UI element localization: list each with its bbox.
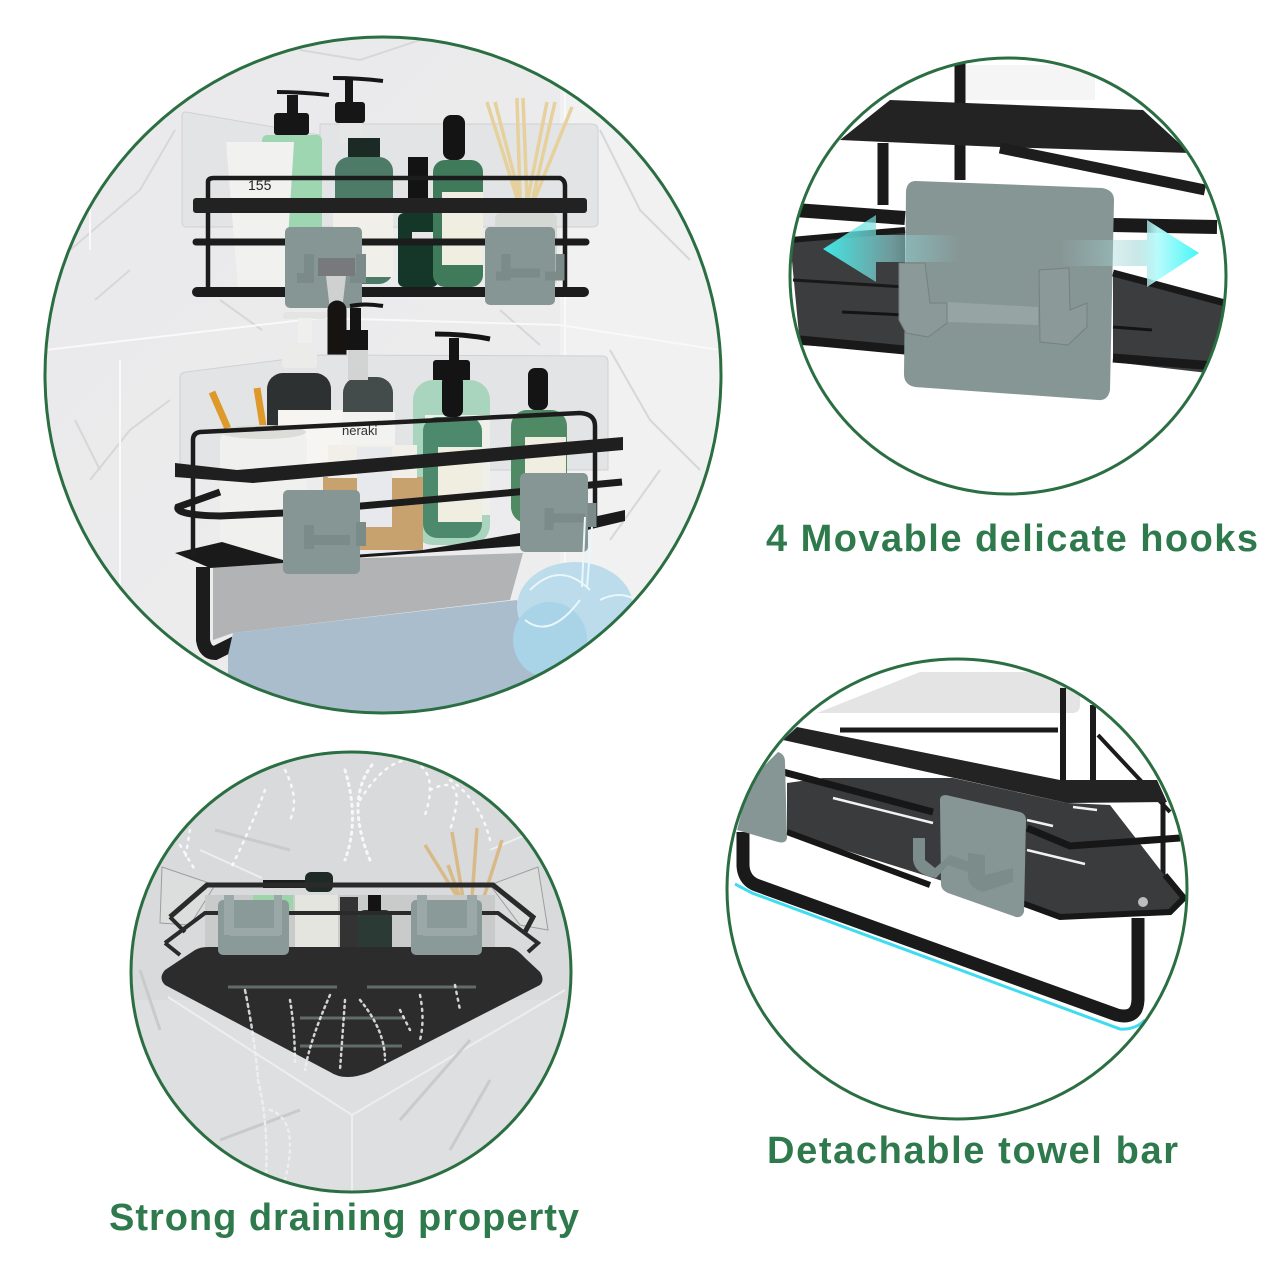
tray: [790, 232, 905, 352]
motion arrow: [823, 215, 1199, 287]
panel: towel bar circle: [720, 655, 1200, 1125]
lower tray and rack: [175, 413, 625, 653]
rack: [165, 885, 538, 955]
lower hooks: [283, 473, 592, 574]
rack wires: [840, 688, 1170, 888]
wood sticks: [425, 828, 502, 903]
adhesive panel: [817, 672, 1080, 713]
top rail: [783, 727, 1167, 803]
tray slots: [833, 798, 1097, 864]
water on tray: [245, 985, 460, 1190]
towel bar: [743, 832, 1138, 1016]
hook arms: [913, 838, 1013, 892]
upper adhesive panel: [182, 112, 598, 227]
right hook plate: [940, 795, 1026, 917]
razor: [318, 258, 355, 355]
upper shelf products: [226, 78, 572, 288]
tray: [787, 778, 1182, 918]
hooks: [218, 895, 482, 955]
heading: towel bar: Detachable towel bar: [767, 1130, 1178, 1172]
adhesive panels: [160, 867, 548, 930]
water splash: [180, 760, 490, 870]
products: [205, 872, 495, 947]
loofah: [513, 517, 636, 678]
tray: [162, 947, 542, 1077]
tray slots: [228, 987, 476, 1046]
heading: draining: Strong draining property: [109, 1197, 579, 1239]
hook plate: [904, 181, 1114, 400]
panel: main product photo circle: [40, 30, 730, 725]
lower adhesive panel: [180, 355, 608, 470]
left hook plate: [737, 752, 787, 842]
upper shelf products: 155: [248, 177, 272, 193]
upper rail: [840, 100, 1190, 153]
heading: hooks: 4 Movable delicate hooks: [766, 518, 1258, 560]
lower shelf products: neraki: [342, 423, 378, 438]
hook arms: [899, 263, 1087, 345]
second rail: [783, 772, 1180, 846]
upper hooks: [285, 227, 560, 308]
upper rack: [193, 178, 587, 292]
towel: [228, 600, 536, 712]
blue glow: [735, 884, 1145, 1029]
panel: draining circle: [125, 750, 575, 1200]
panel: movable hook detail circle: [780, 50, 1230, 500]
shaded wall under lower shelf: [213, 553, 523, 640]
lower shelf products: [212, 304, 567, 558]
